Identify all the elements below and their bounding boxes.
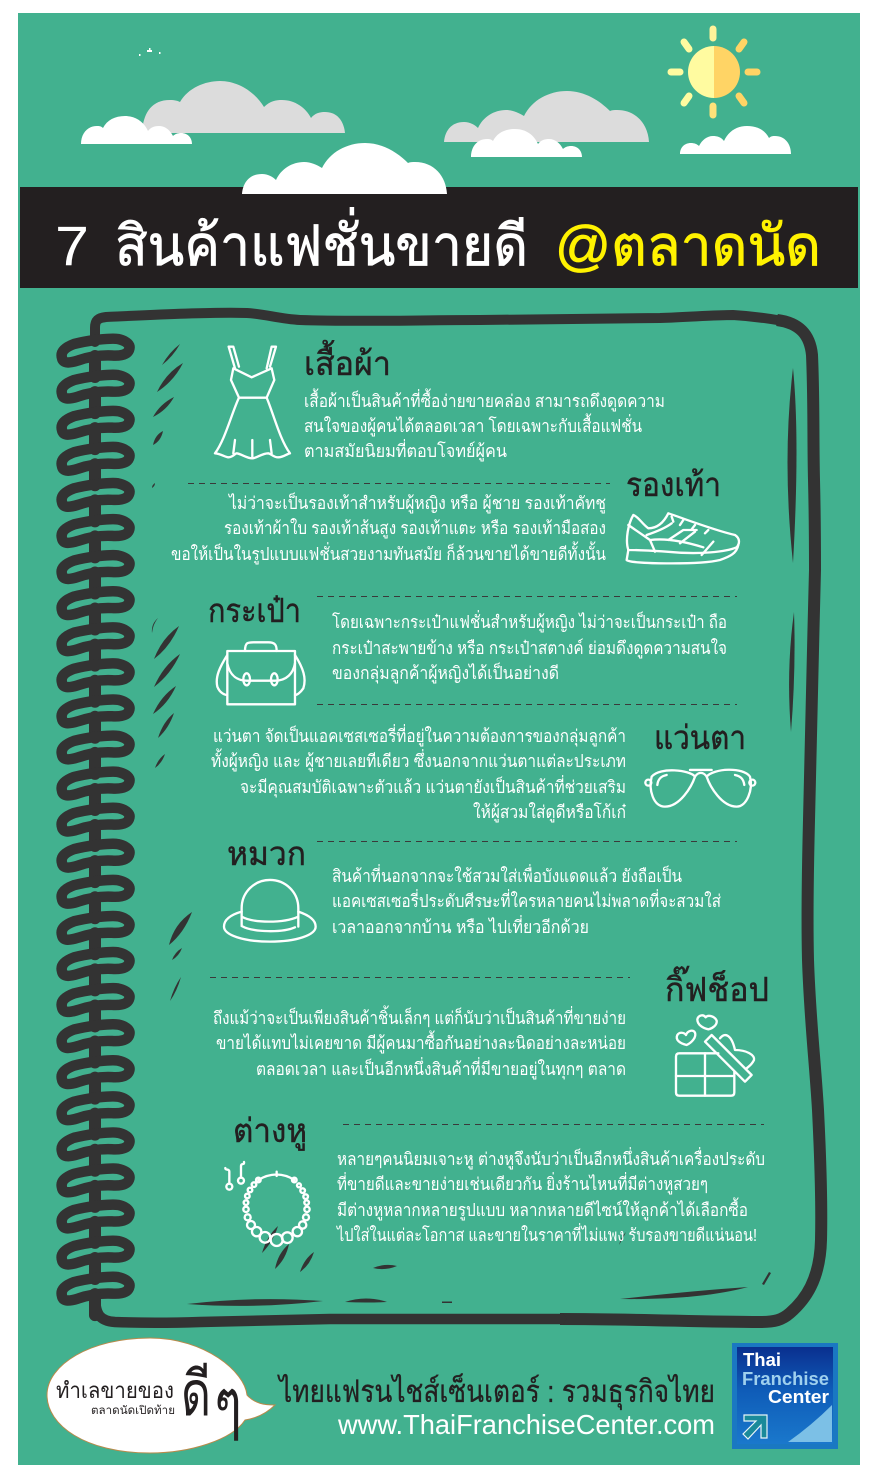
brush marks	[152, 344, 796, 1306]
notebook frame	[95, 313, 821, 1323]
icon: dress	[215, 347, 290, 458]
text: glasses: ทั้งผู้หญิง และ ผู้ชายเลยทีเดียว ซึ่งนอกจากแว่นตาแต่ละประเภท	[211, 748, 626, 772]
text: gift shop: ถึงแม้ว่าจะเป็นเพียงสินค้าชิ้นเล็กๆ แต่ก็นับว่าเป็นสินค้าที่ขายง่าย	[213, 1005, 626, 1028]
icon: hat	[224, 880, 316, 942]
section: hats	[224, 835, 721, 942]
speech bubble	[47, 1338, 275, 1453]
clouds	[81, 81, 791, 157]
footer text: www.ThaiFranchiseCenter.com	[337, 1409, 715, 1440]
speech bubble: ๆ	[214, 1365, 242, 1443]
spiral binding	[62, 339, 130, 1315]
text: shoes: ขอให้เป็นในรูปแบบแฟชั่นสวยงามทันสมัย ก็ล้วนขายได้ขายดีทั้งนั้น	[171, 541, 606, 565]
section: shoes	[171, 466, 739, 565]
text: glasses: จะมีคุณสมบัติเฉพาะตัวแล้ว แว่นตายังเป็นสินค้าที่ช่วยเสริม	[240, 775, 626, 798]
text: shoes	[171, 492, 606, 565]
title: 7	[55, 214, 89, 277]
text: shoes: รองเท้าผ้าใบ รองเท้าส้นสูง รองเท้าแตะ หรือ รองเท้ามือสอง	[224, 518, 606, 539]
icon: bag	[217, 642, 305, 704]
title	[55, 207, 821, 277]
section: gift shop	[213, 965, 769, 1096]
text: bags: กระเป๋าสะพายข้าง หรือ กระเป๋าสตางค์ ย่อมดึงดูดความสนใจ	[332, 638, 727, 659]
text: hats: เวลาออกจากบ้าน หรือ ไปเที่ยวอีกด้วย	[332, 915, 589, 937]
section: glasses	[211, 719, 755, 823]
text: clothes: เสื้อผ้าเป็นสินค้าที่ซื้อง่ายขายคล่อง สามารถดึงดูดความ	[304, 388, 665, 412]
text: earrings: ที่ขายดีและขายง่ายเช่นเดียวกัน ยิ่งร้านไหนที่มีต่างหูสวยๆ	[337, 1172, 708, 1195]
heading: bags: กระเป๋า	[208, 592, 301, 629]
sun icon	[671, 29, 757, 115]
text: gift shop	[213, 1005, 626, 1080]
title: สินค้าแฟชั่นขายดี	[115, 207, 528, 277]
logo: Thai Franchise Center: Thai	[743, 1350, 781, 1370]
dashed dividers	[188, 484, 764, 1124]
text: earrings	[335, 1147, 765, 1245]
text: bags: โดยเฉพาะกระเป๋าแฟชั่นสำหรับผู้หญิง ไม่ว่าจะเป็นกระเป๋า ถือ	[332, 610, 727, 633]
footer text	[276, 1373, 715, 1440]
text: clothes: สนใจของผู้คนได้ตลอดเวลา โดยเฉพาะกับเสื้อแฟชั่น	[304, 413, 642, 437]
icon: necklace and earrings	[225, 1162, 310, 1246]
text: earrings: หลายๆคนนิยมเจาะหู ต่างหูจึงนับว่าเป็นอีกหนึ่งสินค้าเครื่องประดับ	[337, 1147, 765, 1170]
logo: Thai Franchise Center: Center	[768, 1387, 829, 1407]
icon: sneaker	[627, 513, 739, 563]
speech bubble: ทำเลขายของ	[56, 1378, 174, 1403]
icon: gift box	[676, 1015, 754, 1096]
footer text: ไทยแฟรนไชส์เซ็นเตอร์ : รวมธุรกิจไทย	[276, 1373, 715, 1411]
heading: glasses: แว่นตา	[654, 719, 746, 756]
text: hats: แอคเซสเซอรี่ประดับศีรษะที่ใครหลายคนไม่พลาดที่จะสวมใส่	[332, 889, 721, 911]
heading: hats: หมวก	[227, 835, 306, 872]
text: shoes: ไม่ว่าจะเป็นรองเท้าสำหรับผู้หญิง หรือ ผู้ชาย รองเท้าคัทชู	[227, 492, 606, 514]
heading: gift shop: กิ๊ฟช็อป	[665, 965, 769, 1008]
text: clothes: ตามสมัยนิยมที่ตอบโจทย์ผู้คน	[304, 439, 507, 462]
heading: clothes: เสื้อผ้า	[304, 340, 391, 382]
specks	[139, 48, 160, 56]
text: glasses: ให้ผู้สวมใส่ดูดีหรือโก้เก๋	[473, 802, 626, 823]
title: @ตลาดนัด	[555, 214, 821, 277]
logo: Thai Franchise Center: Franchise	[742, 1368, 829, 1389]
title bar	[20, 187, 858, 288]
text: clothes	[304, 388, 665, 462]
text: hats: สินค้าที่นอกจากจะใช้สวมใส่เพื่อบังแดดแล้ว ยังถือเป็น	[332, 864, 682, 886]
text: bags	[332, 610, 727, 684]
text: glasses	[211, 724, 626, 823]
section: bags	[208, 592, 727, 704]
text: bags: ของกลุ่มลูกค้าผู้หญิงได้เป็นอย่างดี	[332, 662, 559, 684]
text: earrings: มีต่างหูหลากหลายรูปแบบ หลากหลายดีไซน์ให้ลูกค้าได้เลือกซื้อ	[337, 1197, 748, 1221]
front cloud	[242, 143, 447, 194]
text: glasses: แว่นตา จัดเป็นแอคเซสเซอรี่ที่อยู่ในความต้องการของกลุ่มลูกค้า	[213, 724, 626, 747]
text: hats	[332, 864, 721, 937]
heading: earrings: ต่างหู	[233, 1112, 307, 1151]
speech bubble: ดี	[181, 1360, 211, 1429]
heading: shoes: รองเท้า	[626, 466, 721, 503]
text: gift shop: ตลอดเวลา และเป็นอีกหนึ่งสินค้าที่มีขายอยู่ในทุกๆ ตลาด	[256, 1057, 626, 1080]
text: earrings: ไปใส่ในแต่ละโอกาส และขายในราคาที่ไม่แพง รับรองขายดีแน่นอน!	[335, 1223, 757, 1245]
logo: Thai Franchise Center	[732, 1343, 838, 1449]
section: clothes	[215, 340, 665, 462]
speech bubble: ตลาดนัดเปิดท้าย	[91, 1404, 175, 1417]
text: gift shop: ขายได้แทบไม่เคยขาด มีผู้คนมาซื้อกันอย่างละนิดอย่างละหน่อย	[216, 1030, 626, 1054]
icon: sunglasses	[645, 770, 755, 807]
section: earrings	[225, 1112, 765, 1246]
